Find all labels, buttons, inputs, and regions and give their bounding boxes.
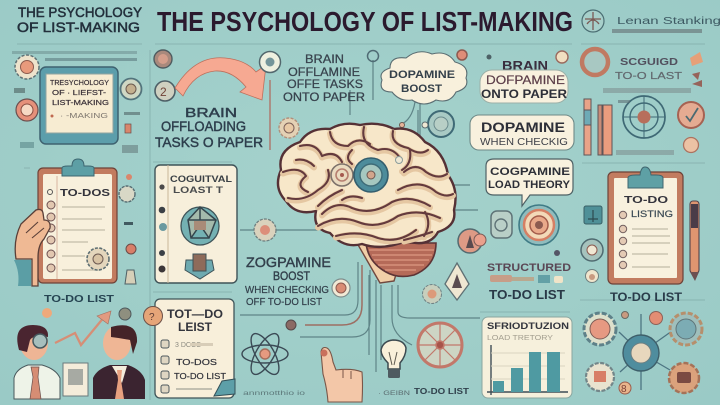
icon: hand holding clipboard bbox=[14, 209, 50, 286]
caption: small atom label: annmotthio io bbox=[243, 391, 306, 397]
panel: to-do listing clipboard bbox=[608, 167, 683, 284]
left heading bbox=[17, 5, 142, 35]
caption: green to-do list: · GEIBN bbox=[378, 390, 410, 397]
icon: wheel bbox=[418, 323, 462, 367]
left heading: OF LIST-MAKING bbox=[17, 20, 140, 35]
illustration: two men and rising arrow bbox=[14, 308, 145, 399]
text block: zogpamine boost: OFF TO-DO LIST bbox=[246, 297, 322, 308]
panel: to-do listing clipboard: LISTING bbox=[631, 209, 673, 220]
left heading: THE PSYCHOLOGY bbox=[18, 5, 142, 20]
small icons left of listing clipboard bbox=[581, 206, 603, 282]
panel: tablet with heading: OF · LIEFST- bbox=[52, 88, 107, 97]
text block: structured to-do list: STRUCTURED bbox=[487, 262, 571, 274]
callout: dopamine boost cloud bbox=[381, 52, 467, 104]
caption: to-do list left: TO-DO LIST bbox=[44, 293, 115, 305]
panel: clipboard to-dos bbox=[38, 159, 117, 283]
panel: dopamine when checking bbox=[470, 115, 574, 150]
panel: tablet with heading: TRESYCHOLOGY bbox=[50, 78, 109, 87]
panel: tot-do list card: ? bbox=[149, 312, 155, 323]
panel: circular number icons with arrow: 2 bbox=[160, 85, 167, 99]
panel: dopamine when checking: WHEN CHECKIG bbox=[480, 137, 568, 148]
text block: brain offloading: OFFLOADING bbox=[161, 119, 246, 134]
panel: tot-do list card bbox=[144, 299, 235, 398]
panel: structure chart: LOAD TRETORY bbox=[487, 333, 553, 342]
icon: light bulb bbox=[381, 340, 406, 378]
panel: cognitive load notebook: COGUITVAL bbox=[170, 174, 232, 185]
text block: zogpamine boost: WHEN CHECKING bbox=[245, 285, 329, 296]
panel: cogpamine load theory: COGPAMINE bbox=[490, 166, 570, 178]
text block: brain offloading: TASKS O PAPER bbox=[155, 135, 263, 150]
panel: brain dofpamine pills bbox=[480, 51, 568, 103]
callout: dopamine boost cloud: BOOST bbox=[401, 83, 442, 95]
circuit connector lines bbox=[240, 60, 480, 372]
text block: zogpamine boost: ZOGPAMINE bbox=[246, 255, 331, 270]
icon: pointing hand bbox=[320, 348, 362, 402]
text block: brain offloading: BRAIN bbox=[185, 105, 237, 120]
icon: atom bbox=[242, 330, 288, 378]
small icons right of clipboard bbox=[119, 174, 136, 284]
icons: target with hexagon bbox=[474, 205, 560, 256]
panel: cogpamine load theory: LOAD THEORY bbox=[488, 179, 571, 191]
text block: brain offlamine: OFFE TASKS bbox=[287, 79, 363, 91]
icons around tablet bbox=[14, 55, 142, 153]
panel: to-do listing clipboard: TO-DO bbox=[624, 194, 668, 206]
panel: tot-do list card: LEIST bbox=[178, 322, 212, 334]
panel: scouled to-do last: TO-O LAST bbox=[615, 70, 683, 82]
panel: cogpamine load theory bbox=[486, 159, 573, 206]
panel: cognitive load notebook bbox=[155, 165, 237, 283]
icons right of brain lower bbox=[422, 229, 482, 304]
icon: small gear near zogpamine bbox=[254, 219, 350, 330]
text block: zogpamine boost bbox=[245, 255, 331, 308]
text block: structured to-do list bbox=[487, 262, 571, 302]
panel: brain dofpamine pills: DOFPAMINE bbox=[486, 73, 565, 87]
caption: green to-do list bbox=[378, 386, 470, 397]
panel: cognitive load notebook: LOAST T bbox=[173, 185, 223, 196]
panel: dopamine when checking: DOPAMINE bbox=[481, 120, 565, 135]
panel: structure chart: SFRIODTUZION bbox=[487, 321, 569, 332]
panel: tot-do list card: TO-DO LIST bbox=[174, 371, 226, 381]
icon: pen bbox=[690, 201, 699, 281]
text block: brain offlamine: ONTO PAPER bbox=[283, 92, 365, 104]
text block: zogpamine boost: BOOST bbox=[273, 269, 311, 283]
panel: tablet with heading: LIST-MAKING bbox=[52, 98, 109, 107]
panel: scouled to-do last bbox=[582, 49, 704, 155]
text block: brain offlamine: BRAIN bbox=[305, 54, 344, 66]
top right heading with icon: Lenan Stanking bbox=[617, 16, 720, 27]
title: THE PSYCHOLOGY OF LIST-MAKING bbox=[157, 6, 573, 37]
panel: circular number icons with arrow bbox=[154, 50, 266, 101]
callout: dopamine boost cloud: DOPAMINE bbox=[389, 69, 455, 81]
diagram: network of gears bbox=[584, 312, 702, 395]
top right heading with icon bbox=[582, 10, 720, 33]
text block: brain offlamine: OFFLAMINE bbox=[288, 67, 360, 79]
panel: tot-do list card: TOT—DO bbox=[167, 309, 223, 321]
panel: tot-do list card: TO-DOS bbox=[176, 357, 217, 367]
panel: brain dofpamine pills: BRAIN bbox=[502, 58, 548, 73]
panel: scouled to-do last: SCGUIGD bbox=[620, 56, 678, 68]
caption: green to-do list: TO-DO LIST bbox=[414, 386, 470, 396]
icon: brain bbox=[278, 124, 456, 283]
diagram: network of gears: 8 bbox=[621, 384, 627, 395]
panel: tablet with heading: · -MAKING bbox=[60, 111, 108, 120]
panel: brain dofpamine pills: ONTO PAPER bbox=[481, 87, 567, 101]
text block: brain offlamine bbox=[283, 54, 365, 104]
panel: tablet with heading bbox=[12, 51, 137, 144]
small round icons near center top bbox=[260, 50, 467, 138]
text block: structured to-do list: TO-DO LIST bbox=[489, 288, 565, 302]
panel: structure chart bbox=[482, 317, 572, 398]
text block: brain offloading bbox=[155, 105, 263, 150]
panel: clipboard to-dos: TO-DOS bbox=[60, 187, 110, 199]
caption: to-do list right: TO-DO LIST bbox=[610, 292, 682, 304]
panel: tot-do list card: 3 DCCC bbox=[175, 342, 201, 349]
